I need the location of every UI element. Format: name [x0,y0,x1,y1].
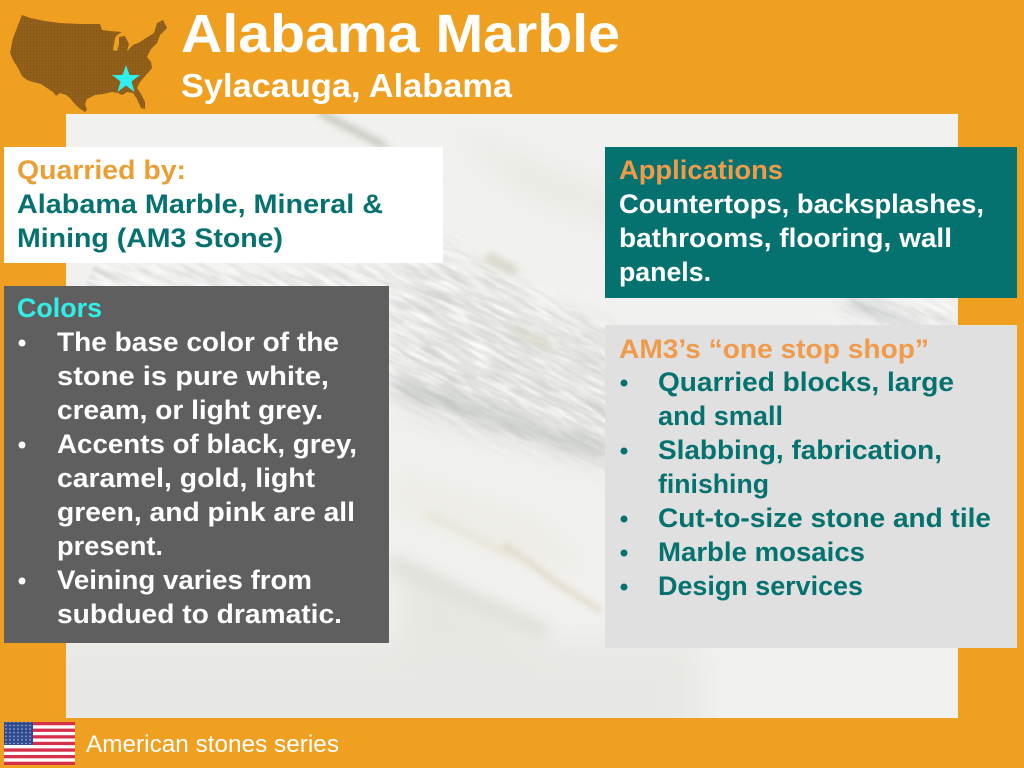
bullet list: services: finishing [658,469,769,499]
icon: US flag [4,722,75,765]
text: applications list: Countertops, backsplashes, [619,189,984,219]
bullet list: colors [18,327,357,629]
bullet list: services: Quarried blocks, large [658,367,954,397]
bullet list: colors: Accents of black, grey, [57,429,357,459]
bullet list: services: Cut-to-size stone and tile [658,503,991,533]
panel: quarried by [4,147,443,263]
bullet list: colors: green, and pink are all [57,497,355,527]
panel: colors [4,286,389,643]
heading: applications: Applications [619,155,783,185]
bullet list: services [620,367,991,601]
text: quarry name [17,189,383,253]
subtitle: Sylacauga, Alabama [181,67,513,104]
text: applications list: panels. [619,257,711,287]
title: Alabama Marble [181,4,620,64]
panel: applications [605,147,1017,298]
text: applications list: bathrooms, flooring, wall [619,223,952,253]
text: quarry name: Mining (AM3 Stone) [17,223,283,253]
icon: location star [112,65,140,92]
panel: one stop shop [605,325,1017,648]
bullet list: services: Design services [658,571,863,601]
bullet list: services: and small [658,401,783,431]
icon: US map with location star [10,15,167,112]
bullet list: colors: subdued to dramatic. [57,599,342,629]
bullet list: colors: The base color of the [57,327,339,357]
bullet list: colors: caramel, gold, light [57,463,315,493]
heading: one stop shop: AM3’s “one stop shop” [619,334,929,364]
footer label: American stones series [86,731,339,758]
bullet list: colors: present. [57,531,163,561]
bullet list: services: Marble mosaics [658,537,865,567]
heading: colors: Colors [17,293,102,323]
marble photo background [66,114,958,718]
bullet list: colors: Veining varies from [57,565,312,595]
text: applications list [619,189,984,287]
bullet list: colors: stone is pure white, [57,361,329,391]
heading: quarried by: Quarried by: [17,155,186,185]
text: quarry name: Alabama Marble, Mineral & [17,189,383,219]
bullet list: services: Slabbing, fabrication, [658,435,942,465]
bullet list: colors: cream, or light grey. [57,395,323,425]
